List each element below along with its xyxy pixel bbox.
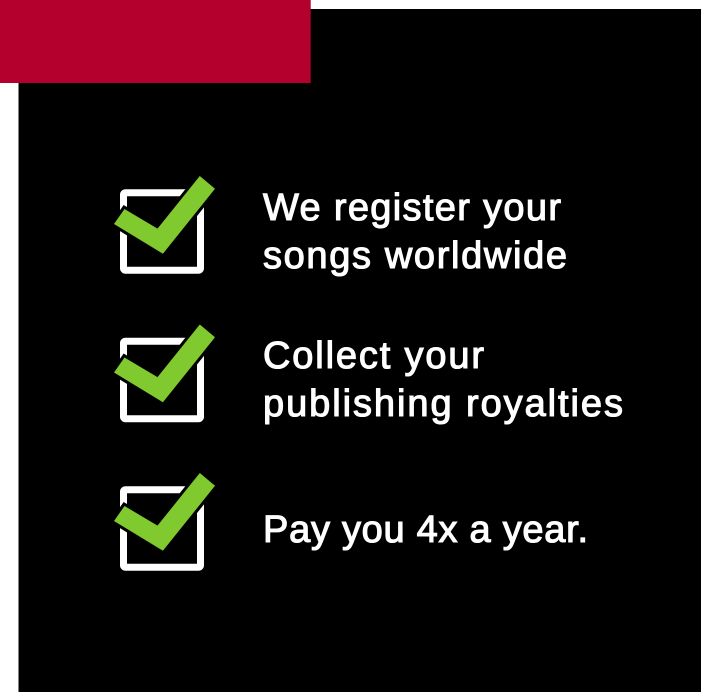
text: we register your songs worldwide: We register your (263, 187, 561, 229)
red header block (0, 0, 311, 83)
checklist item 1 (114, 176, 567, 277)
checklist item 2 (114, 324, 623, 425)
text: collect your publishing royalties (263, 335, 623, 425)
text: collect your publishing royalties: publishing royalties (263, 383, 623, 425)
icon: checkbox with green check 1 (114, 176, 215, 270)
checklist item 3 (114, 473, 588, 567)
text: collect your publishing royalties: Collect your (263, 335, 484, 377)
text: we register your songs worldwide (263, 187, 567, 277)
text: we register your songs worldwide: songs worldwide (263, 235, 567, 277)
icon: checkbox with green check 3 (114, 473, 215, 567)
icon: checkbox with green check 2 (114, 324, 215, 419)
text: pay you 4x a year: Pay you 4x a year. (263, 509, 588, 551)
